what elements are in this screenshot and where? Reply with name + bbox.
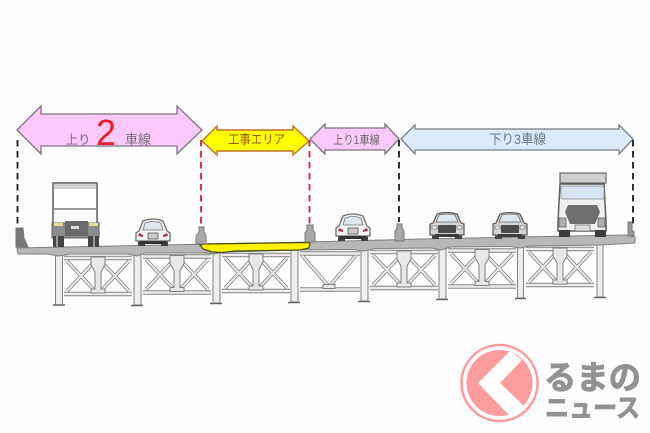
logo: くるまのニュース — [462, 345, 641, 425]
arrow: 上り1車線: 上り1車線 — [333, 132, 380, 147]
dashed guide lines — [18, 140, 633, 228]
car: upbound lane 1 — [336, 214, 370, 241]
bridge columns — [53, 243, 606, 306]
arrow: 下り3車線 — [401, 125, 633, 154]
truss bridge girders — [64, 248, 594, 294]
car: downbound lane 2 — [493, 212, 527, 239]
truck: left lane — [52, 183, 99, 247]
logo text: ニュース: ニュース — [545, 388, 640, 425]
arrow: 上り2車線: 上り — [65, 133, 91, 147]
car: downbound lane 1 — [430, 212, 464, 239]
arrow: 下り3車線: 下り3車線 — [489, 132, 546, 147]
arrow: 工事エリア — [202, 126, 309, 155]
arrow: 上り1車線 — [310, 124, 399, 154]
arrow: 上り2車線 — [17, 106, 202, 154]
road deck — [17, 235, 635, 256]
arrow: 工事エリア: 工事エリア — [228, 132, 285, 147]
truck: right lane — [558, 173, 606, 237]
barriers — [16, 222, 634, 247]
arrow: 上り2車線: 車線 — [125, 132, 151, 147]
arrow: 上り2車線: 2 — [96, 112, 116, 153]
logo text: るまの: るまの — [544, 351, 641, 399]
construction area (yellow deck section) — [200, 242, 310, 252]
logo icon — [462, 345, 538, 421]
car: upbound lane 2 — [136, 219, 170, 246]
